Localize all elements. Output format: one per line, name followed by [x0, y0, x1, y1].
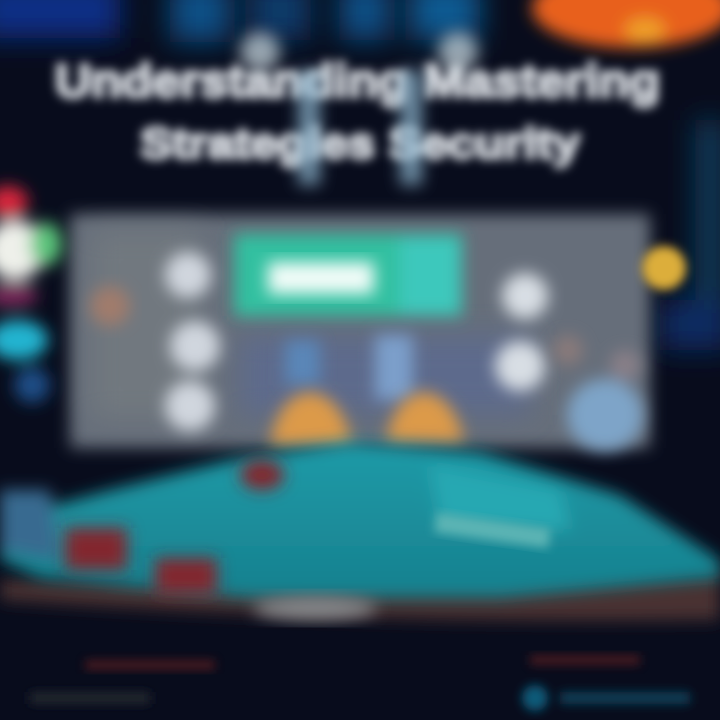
- left colorful stack: [0, 186, 62, 403]
- panel shading: [90, 230, 530, 420]
- green banner: [234, 234, 462, 316]
- yellow coin: [642, 246, 686, 290]
- table edge: [0, 570, 720, 621]
- table bottom highlight: [253, 596, 377, 620]
- top glow: blue: [0, 0, 720, 350]
- title: Strategies Security: [140, 119, 581, 168]
- orange figures: [270, 392, 464, 445]
- title: Understanding Mastering: [55, 54, 660, 107]
- red tokens: [65, 460, 284, 594]
- table surface: [0, 442, 720, 598]
- white icons right: [495, 273, 548, 391]
- footer small text: [30, 685, 690, 711]
- blue figures: [285, 335, 643, 451]
- banner label: [268, 262, 374, 294]
- title: [55, 54, 660, 168]
- panel: game board: [70, 214, 650, 451]
- orange icon left: [90, 286, 130, 326]
- white icons left: [165, 252, 220, 431]
- title sparkle decorations: [240, 32, 478, 185]
- table label: [434, 512, 551, 548]
- footer red text: [85, 655, 640, 670]
- top glow: orange: [532, 0, 720, 48]
